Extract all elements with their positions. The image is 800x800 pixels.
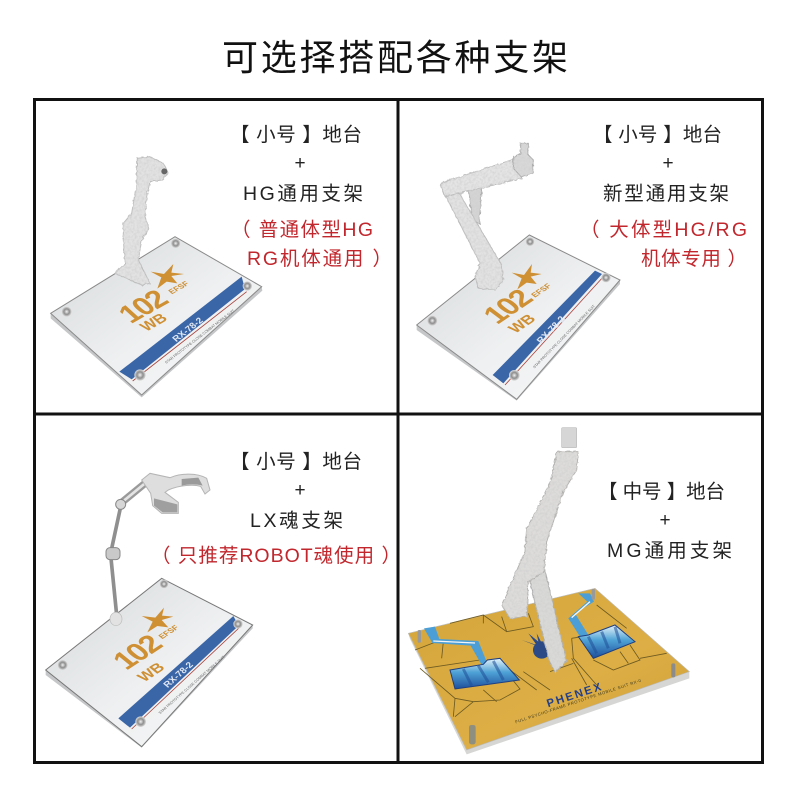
photo: acrylic base and HG stand: STAR PROTOTYPE CLOSE COMBAT MOBILE SUIT [164,308,236,364]
label: MG stand: MG通用支架 [607,540,732,562]
plus sign: + [294,153,306,174]
photo: acrylic base and new stand: 102 [476,284,540,329]
label: new stand: 新型通用支架 [603,183,729,205]
label: small base: 【 小号 】地台 [593,124,722,146]
panel grid frame [34,99,763,763]
photo: acrylic base and new stand [417,143,620,401]
note line 1: （ 普通体型HG [231,219,373,241]
note: （ 只推荐ROBOT魂使用 ） [151,545,401,567]
panel: small base with new stand [417,124,747,401]
photo: acrylic base and LX stand: 102 [106,630,170,675]
title: 可选择搭配各种支架 [222,37,568,78]
photo: acrylic base and LX stand: STAR PROTOTYPE CLOSE COMBAT MOBILE SUIT [158,655,227,715]
panel: medium base with MG stand [408,428,732,754]
photo: acrylic base and HG stand [51,157,262,397]
photo: yellow base and MG stand: PHENEX [545,681,605,710]
photo: acrylic base and LX stand [46,473,253,748]
plus sign: + [662,153,674,174]
photo: acrylic base and new stand: RX-78-2 [535,314,567,345]
photo: acrylic base and HG stand: RX-78-2 [170,316,205,344]
plus sign: + [294,480,306,501]
label: small base: 【 小号 】地台 [230,124,362,146]
photo: acrylic base and HG stand: EFSF [167,280,191,296]
label: small base: 【 小号 】地台 [230,451,362,473]
photo: yellow base and MG stand [408,428,689,754]
photo: acrylic base and new stand: EFSF [529,282,554,299]
note line 2: 机体专用 ） [641,248,747,270]
panel: small base with HG stand [51,124,392,397]
photo: yellow base and MG stand: FULL PSYCHO-FRAME PROTOTYPE MOBILE SUIT RX-0 [514,678,642,724]
photo: acrylic base and HG stand: 102 [112,284,175,329]
photo: acrylic base and HG stand: WB [137,311,171,335]
emblem [522,633,550,659]
label: medium base: 【 中号 】地台 [598,481,725,503]
photo: acrylic base and LX stand: RX-78-2 [161,660,195,689]
label: HG stand: HG通用支架 [243,183,363,205]
label: LX stand: LX魂支架 [250,510,343,532]
photo: acrylic base and LX stand: WB [134,660,169,685]
note line 1: （ 大体型HG/RG [580,219,747,241]
plus sign: + [659,510,671,531]
photo: acrylic base and new stand: WB [505,312,540,336]
panel: small base with LX stand [46,451,401,748]
photo: acrylic base and new stand: STAR PROTOTYPE CLOSE COMBAT MOBILE SUIT [532,304,597,369]
note line 2: RG机体通用 ） [247,248,392,270]
photo: acrylic base and LX stand: EFSF [157,624,181,641]
